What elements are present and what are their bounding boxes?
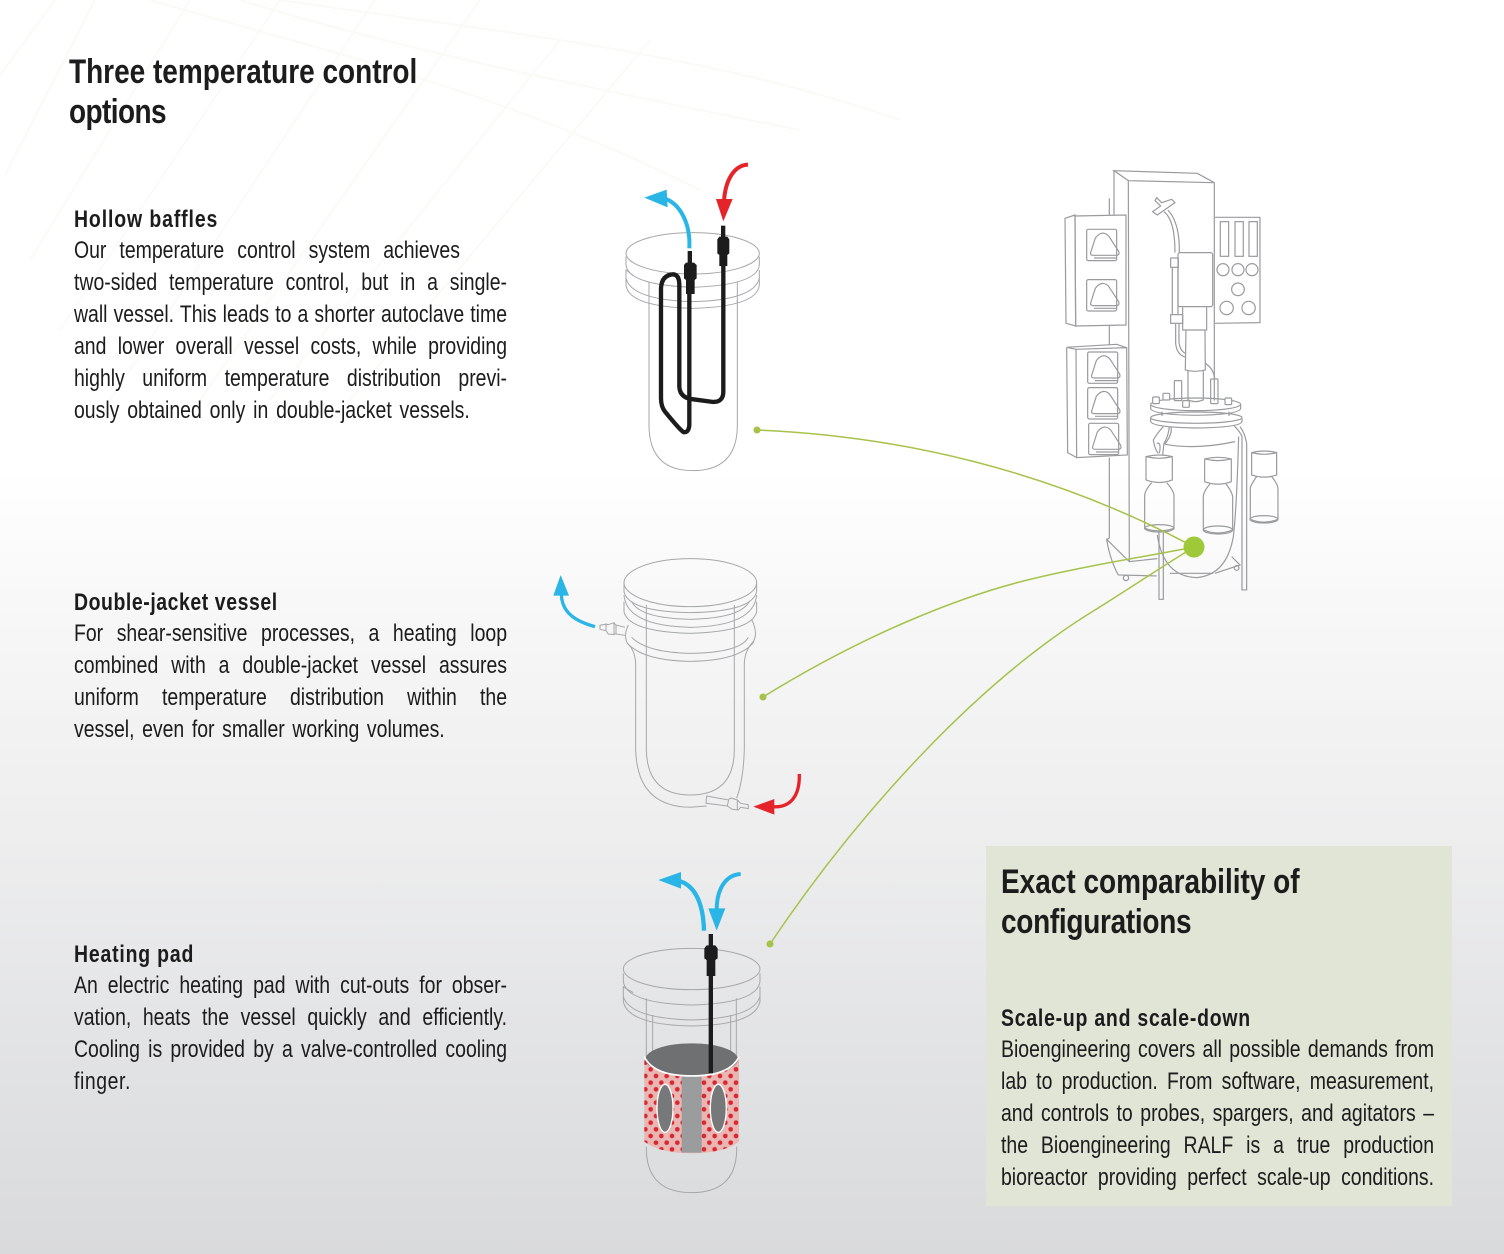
panel text: scale-up and scale-down: bioreactor providing perfect scale-up conditions. xyxy=(1001,1164,1434,1191)
illustration: hollow baffles vessel xyxy=(626,165,759,471)
illustration: double-jacket vessel xyxy=(553,559,799,815)
illustration: heating pad vessel xyxy=(623,872,760,1193)
panel text: scale-up and scale-down: Bioengineering covers all possible demands from xyxy=(1001,1036,1434,1063)
connector: heating pad to bioreactor xyxy=(767,547,1194,947)
panel text: scale-up and scale-down: Scale-up and scale-down xyxy=(1001,1005,1251,1032)
text block: hollow baffles xyxy=(74,206,507,424)
title: options xyxy=(69,93,166,131)
arrow: blue outlet xyxy=(658,872,704,931)
text block: double-jacket vessel: combined with a double-jacket vessel assures xyxy=(74,652,507,679)
text block: double-jacket vessel: vessel, even for smaller working volumes. xyxy=(74,716,445,743)
text block: hollow baffles: Our temperature control system achieves xyxy=(74,237,460,264)
panel heading xyxy=(1001,863,1300,941)
text block: hollow baffles: Hollow baffles xyxy=(74,206,218,233)
text block: heating pad: vation, heats the vessel quickly and efficiently. xyxy=(74,1004,507,1031)
green target dot xyxy=(1184,536,1204,558)
text block: heating pad xyxy=(74,941,507,1095)
heating pad xyxy=(644,1043,739,1153)
text block: heating pad: finger. xyxy=(74,1068,131,1095)
panel text: scale-up and scale-down xyxy=(1001,1005,1434,1191)
connector: hollow baffles to bioreactor xyxy=(754,427,1194,547)
text block: heating pad: An electric heating pad with cut-outs for obser- xyxy=(74,972,507,999)
text block: double-jacket vessel: For shear-sensitive processes, a heating loop xyxy=(74,620,507,647)
text block: heating pad: Cooling is provided by a valve-controlled cooling xyxy=(74,1036,507,1063)
panel text: scale-up and scale-down: lab to production. From software, measurement, xyxy=(1001,1068,1434,1095)
text block: hollow baffles: two-sided temperature control, but in a single- xyxy=(74,269,507,296)
text block: double-jacket vessel xyxy=(74,589,507,743)
text block: hollow baffles: and lower overall vessel costs, while providing xyxy=(74,333,507,360)
arrow: blue inlet xyxy=(708,874,741,931)
title: Three temperature control xyxy=(69,53,417,91)
panel text: scale-up and scale-down: and controls to probes, spargers, and agitators – xyxy=(1001,1100,1434,1127)
text block: heating pad: Heating pad xyxy=(74,941,194,968)
text block: double-jacket vessel: Double-jacket vessel xyxy=(74,589,278,616)
arrow: red inlet xyxy=(753,774,799,815)
arrow: blue outlet xyxy=(644,190,689,248)
arrow: red inlet xyxy=(716,165,748,221)
arrow: blue outlet xyxy=(553,575,595,627)
title xyxy=(69,53,417,131)
panel heading: configurations xyxy=(1001,903,1191,941)
text block: hollow baffles: ously obtained only in double-jacket vessels. xyxy=(74,397,470,424)
connector: double-jacket vessel to bioreactor xyxy=(760,547,1194,700)
bioreactor illustration xyxy=(1065,171,1278,599)
text block: hollow baffles: highly uniform temperature distribution previ- xyxy=(74,365,507,392)
panel heading: Exact comparability of xyxy=(1001,863,1300,901)
panel: exact comparability xyxy=(986,846,1452,1206)
text block: double-jacket vessel: uniform temperature distribution within the xyxy=(74,684,507,711)
text block: hollow baffles: wall vessel. This leads to a shorter autoclave time xyxy=(74,301,507,328)
panel text: scale-up and scale-down: the Bioengineering RALF is a true production xyxy=(1001,1132,1434,1159)
